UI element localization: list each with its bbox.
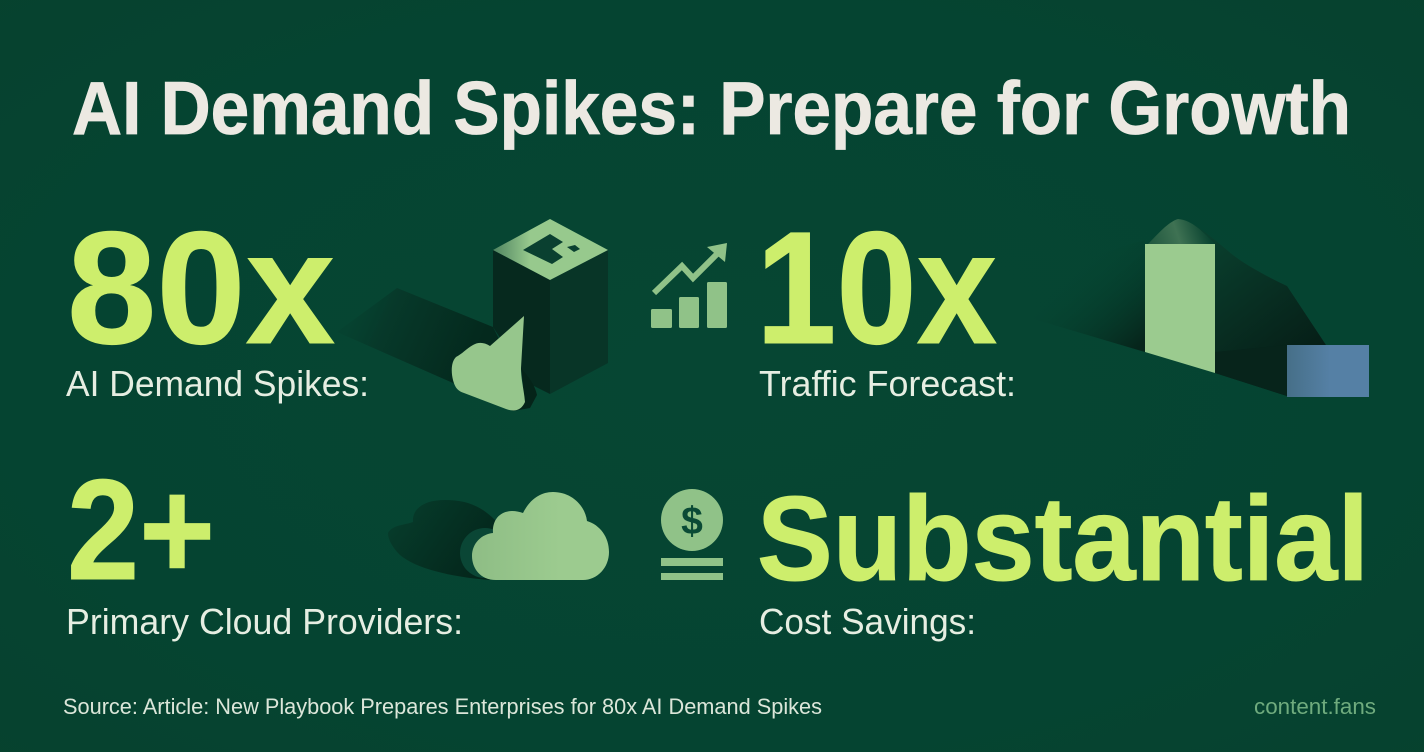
stat value: Substantial: Substantial <box>757 472 1369 606</box>
stat value: 2+: 2+ <box>67 451 215 610</box>
lines <box>661 558 723 566</box>
stat value: 10x: 10x <box>756 198 997 377</box>
cloud body <box>472 492 609 580</box>
cloud shadow <box>388 500 495 580</box>
icon: dollar coin with lines <box>661 489 723 580</box>
stat value: 80x: 80x <box>67 198 335 377</box>
stat label: Cost Savings: Cost Savings: <box>759 601 976 642</box>
block shadow <box>337 288 530 411</box>
mound top <box>1148 219 1215 244</box>
block top face <box>493 219 608 280</box>
coin <box>661 489 723 551</box>
icon: rising bar chart with arrow <box>651 243 727 328</box>
cloud fragment shadow <box>513 368 537 411</box>
right shadow <box>1178 219 1326 396</box>
source note: Source: Article: New Playbook Prepares Enterprises for 80x AI Demand Spikes <box>63 694 822 719</box>
bars <box>651 309 672 328</box>
dollar sign: $ <box>681 500 703 543</box>
stat label: Traffic Forecast: Traffic Forecast: <box>759 363 1016 404</box>
block top cutouts <box>523 234 580 264</box>
cloud back edge <box>460 528 510 578</box>
block right face <box>550 250 608 394</box>
brand credit: content.fans <box>1254 694 1376 719</box>
icon: isometric server block with cloud <box>337 219 608 411</box>
icon: cloud <box>388 492 609 580</box>
blue panel <box>1287 345 1369 397</box>
stat: 2+ primary cloud providers <box>66 451 463 642</box>
green block face <box>1145 244 1215 373</box>
stat: 80x AI demand spikes <box>66 198 369 404</box>
stat: 10x traffic forecast <box>756 198 1016 404</box>
stat label: Primary Cloud Providers: Primary Cloud Providers: <box>66 601 463 642</box>
cloud fragment <box>452 316 525 411</box>
floor shadow <box>1215 345 1287 396</box>
left shadow <box>1020 240 1145 352</box>
trend arrow <box>654 254 717 293</box>
stat label: AI Demand Spikes: AI Demand Spikes: <box>66 363 369 404</box>
stat: substantial cost savings <box>757 472 1369 642</box>
title: AI Demand Spikes: Prepare for Growth <box>72 66 1351 150</box>
block left face <box>493 250 550 394</box>
icon: block with shadow and blue panel <box>1020 219 1369 397</box>
